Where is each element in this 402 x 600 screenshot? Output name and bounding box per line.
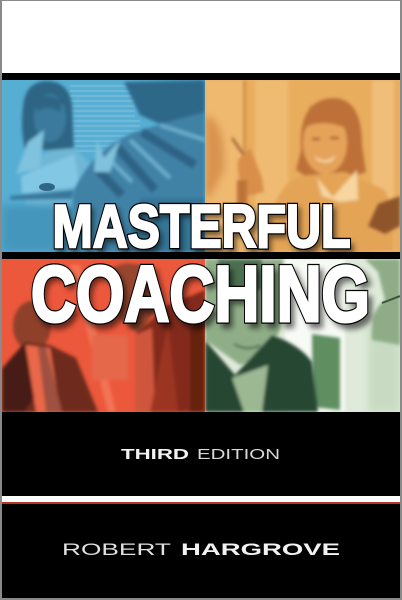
background columns <box>205 80 394 252</box>
author name: ROBERT <box>62 540 171 559</box>
edition label <box>121 446 280 463</box>
man at left <box>2 301 98 412</box>
clipboard and paper <box>21 154 80 194</box>
man at right <box>112 263 205 412</box>
background panel <box>312 334 340 410</box>
man with long hair <box>16 81 92 215</box>
divider rule: white and red <box>2 496 400 504</box>
raised hand at right <box>368 196 400 234</box>
photo panel: blue, two people talking <box>2 80 205 252</box>
black band between photos <box>2 252 400 259</box>
back wall detail <box>70 265 128 412</box>
person with striped sweater <box>72 80 205 252</box>
author name: HARGROVE <box>181 540 340 559</box>
man's head and jacket <box>205 259 318 412</box>
title shadow <box>34 197 375 345</box>
window blinds <box>70 86 140 151</box>
author name <box>62 540 340 559</box>
photo panel: orange, smiling woman <box>205 80 400 252</box>
woman <box>265 98 394 252</box>
edition label: EDITION <box>197 446 280 463</box>
blurred figure at left <box>205 115 224 200</box>
hand holding pen <box>232 138 264 210</box>
photo panel: red, two men in suits <box>2 259 205 412</box>
photo panel: green, man looking down <box>205 259 400 412</box>
edition label: THIRD <box>121 446 189 463</box>
lower left tones <box>2 205 87 252</box>
face at right edge <box>365 259 400 345</box>
